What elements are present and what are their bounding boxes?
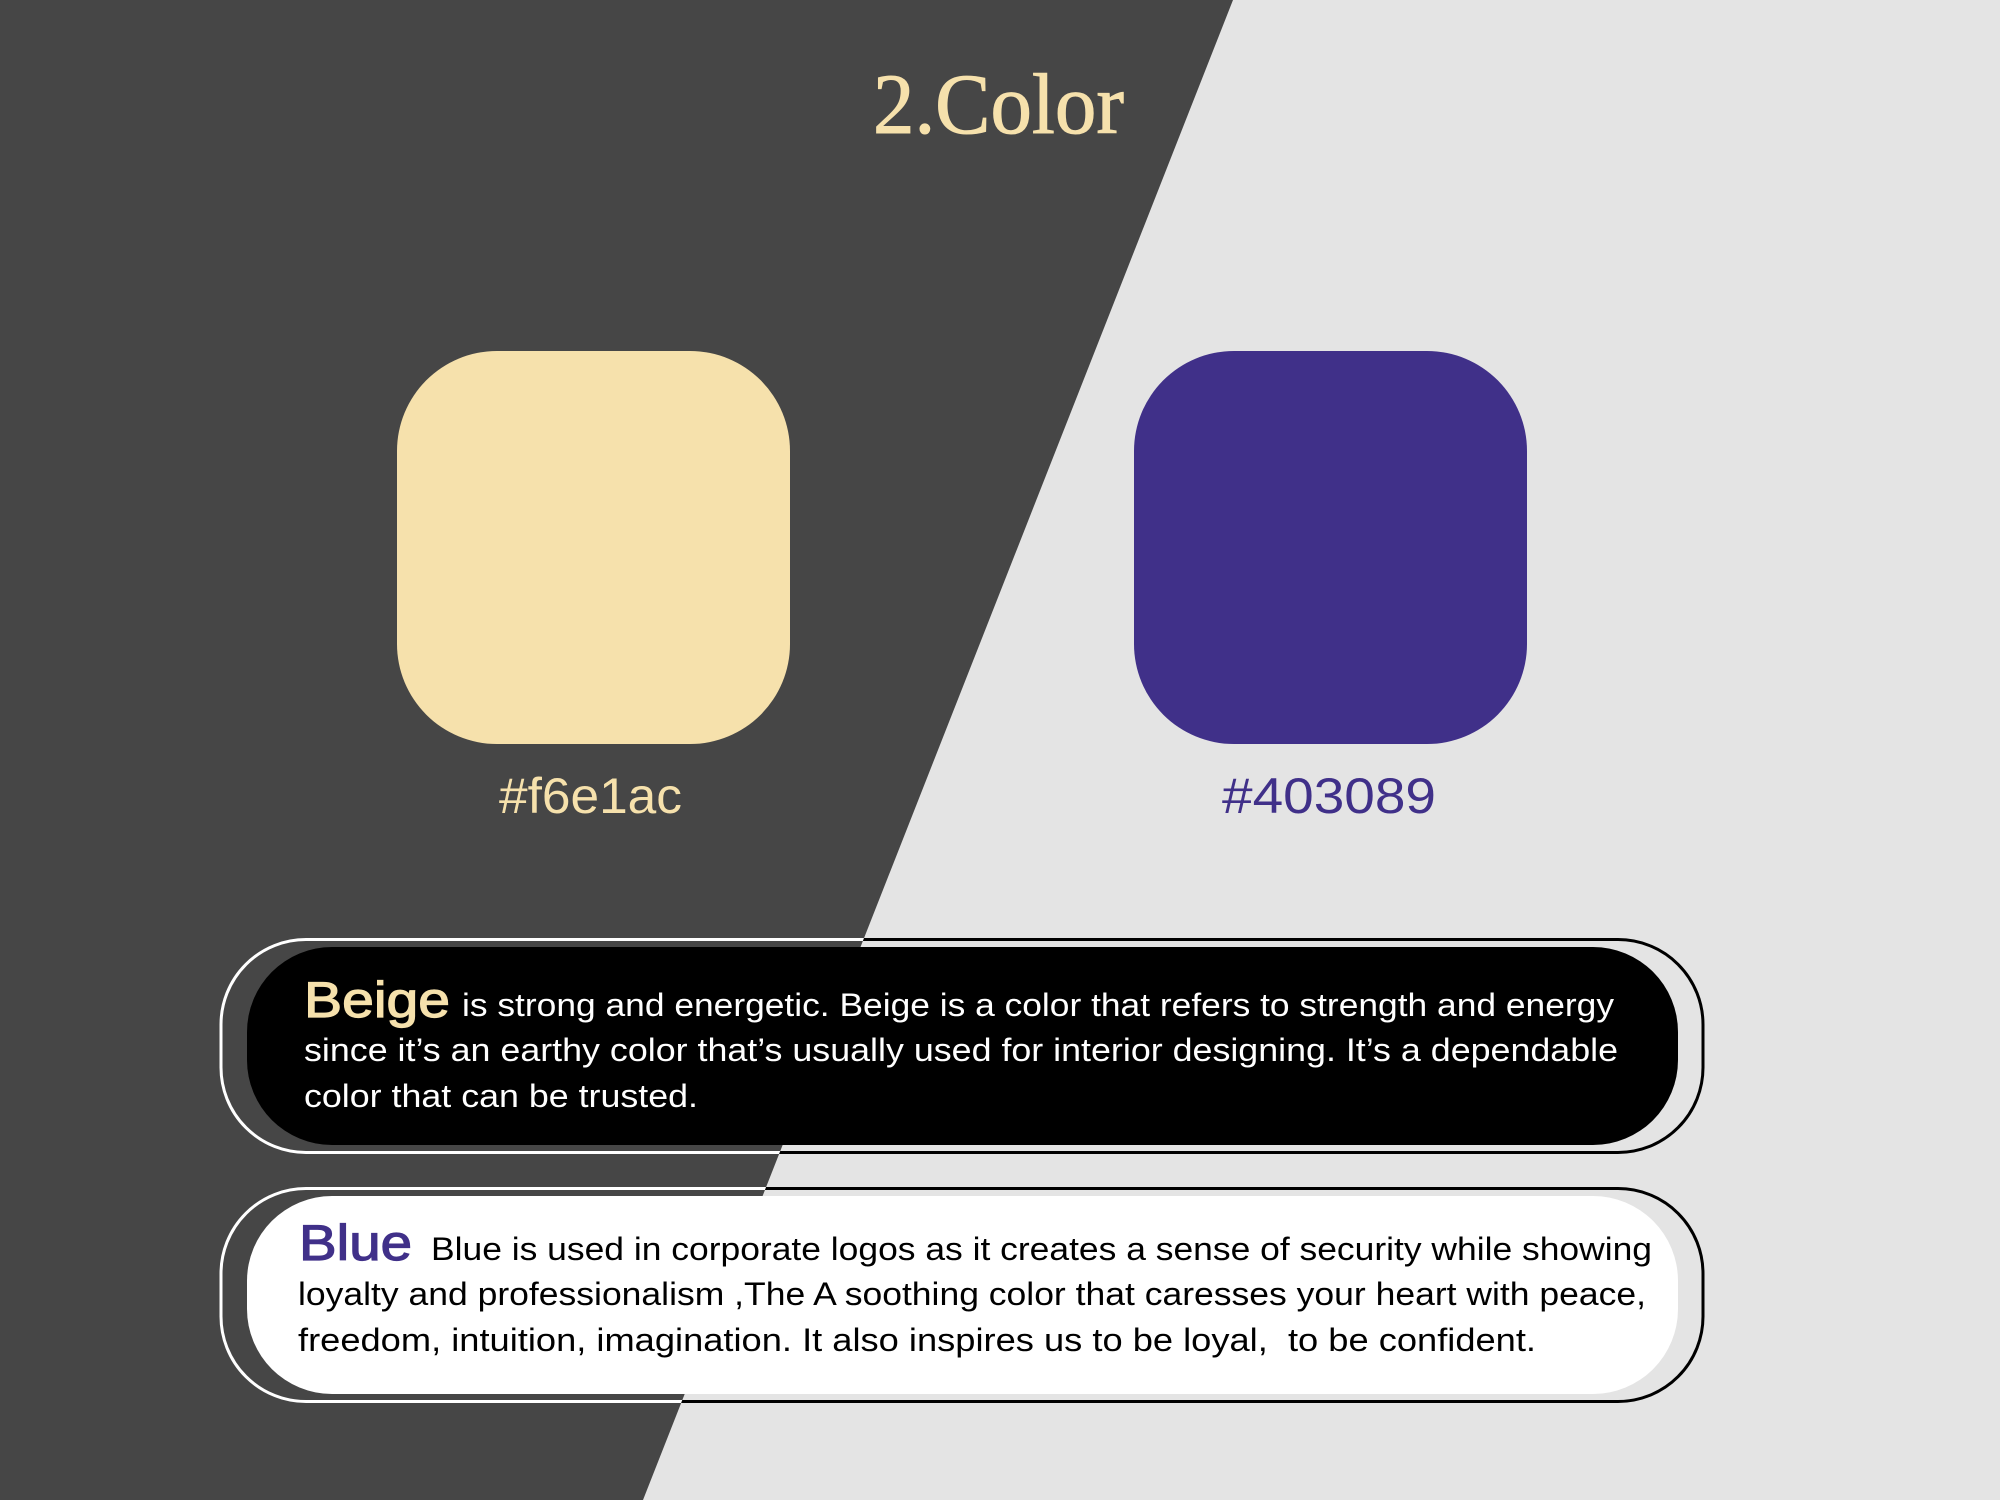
text block: blue description xyxy=(298,1215,1652,1358)
text block: beige description: color that can be trusted. xyxy=(304,1078,698,1114)
hex label: beige: #f6e1ac xyxy=(499,768,682,824)
outline: beige panel xyxy=(221,940,1703,1152)
hex label: blue: #403089 xyxy=(1222,768,1436,824)
text block: blue description: Blue is used in corporate logos as it creates a sense of security while showing xyxy=(431,1231,1652,1267)
text block: blue description: freedom, intuition, imagination. It also inspires us to be loyal, to be confident. xyxy=(298,1322,1536,1358)
swatch: beige xyxy=(397,351,790,824)
text block: beige description xyxy=(304,972,1618,1114)
title: 2.Color xyxy=(873,56,1124,152)
outline: blue panel xyxy=(221,1188,1703,1402)
text block: blue description: Blue xyxy=(299,1215,412,1271)
panel: blue description xyxy=(221,1188,1703,1402)
text block: beige description: is strong and energetic. Beige is a color that refers to strength and energy xyxy=(462,987,1614,1023)
text block: blue description: loyalty and professionalism ,The A soothing color that caresses your heart with peace, xyxy=(298,1276,1646,1312)
swatch: blue xyxy=(1134,351,1527,824)
pill: beige panel fill xyxy=(247,947,1678,1145)
text block: beige description: since it’s an earthy color that’s usually used for interior designing. It’s a dependable xyxy=(304,1032,1618,1068)
panel: beige description xyxy=(221,940,1703,1152)
text block: beige description: Beige xyxy=(304,972,450,1028)
pill: blue panel fill xyxy=(247,1196,1678,1394)
background: dark diagonal side xyxy=(0,0,1233,1500)
